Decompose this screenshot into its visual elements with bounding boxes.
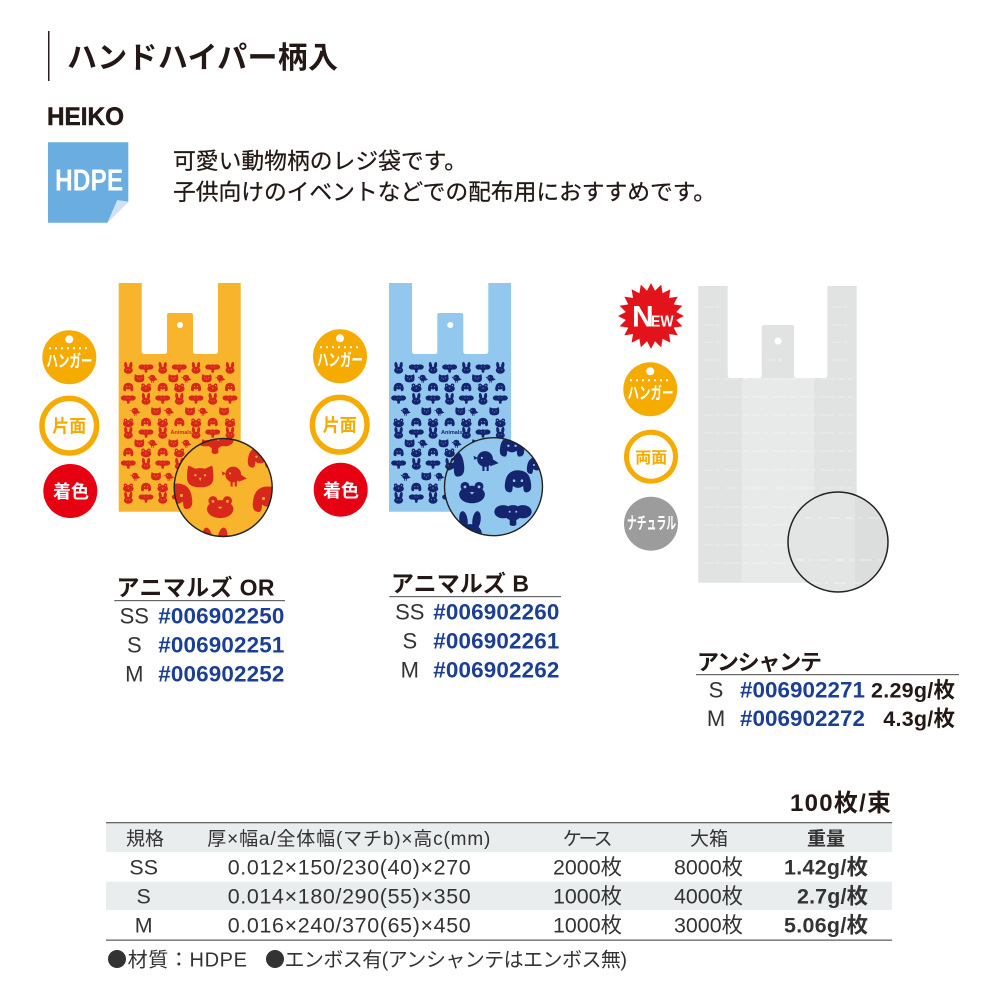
product codes and weights: enchante: 2.29g/枚 <box>871 678 955 702</box>
product codes: animals B: S <box>402 629 417 654</box>
product codes: animals B: SS <box>395 599 424 624</box>
icon: HDPE material tag <box>48 142 128 223</box>
bag: natural translucent <box>698 286 857 583</box>
product codes: animals B: M <box>401 658 419 683</box>
product codes and weights: enchante: S <box>709 677 723 702</box>
product codes: animals B: #006902262 <box>433 658 559 683</box>
table row: S: 2.7g/枚 <box>797 884 868 908</box>
table row: S: S <box>137 884 151 908</box>
magnifier: orange pattern <box>174 438 273 538</box>
product codes and weights: enchante: 4.3g/枚 <box>883 707 955 731</box>
product codes: animals OR: SS <box>120 603 149 628</box>
product codes: animals OR: S <box>127 633 142 658</box>
product codes and weights: enchante: #006902272 <box>740 706 865 731</box>
table row: SS: 0.012×150/230(40)×270 <box>228 855 471 879</box>
description text <box>173 148 716 205</box>
product codes: animals OR: #006902251 <box>158 633 284 658</box>
label: animals OR: アニマルズ OR <box>116 575 275 601</box>
footnote: ●材質：HDPE <box>107 944 247 973</box>
product codes and weights: enchante: M <box>707 706 725 731</box>
badge: hanger <box>623 362 677 416</box>
unit note: 100枚/束 <box>790 790 891 817</box>
table row: S: 4000枚 <box>674 884 743 908</box>
magnifier: blue pattern <box>444 437 544 536</box>
product codes: animals B <box>395 599 559 683</box>
product codes and weights: enchante <box>707 677 955 731</box>
badge: natural: ナチュラル <box>627 514 676 533</box>
magnifier: natural pattern <box>788 490 895 594</box>
badge: colored <box>43 464 97 518</box>
badge: one side print <box>312 397 367 452</box>
badge: new <box>618 283 684 349</box>
product codes: animals B: #006902261 <box>433 629 559 654</box>
badge: both sides print: 両面 <box>635 450 667 467</box>
label: enchante: アンシャンテ <box>697 650 822 675</box>
table header: 規格 <box>126 828 164 850</box>
badge: new: EW <box>651 314 674 331</box>
table row: SS: 2000枚 <box>553 855 622 879</box>
logo: HEIKO: HEIKO <box>47 103 124 131</box>
bag: blue <box>389 283 511 512</box>
table row: M <box>135 913 868 937</box>
badge: one side print: 片面 <box>52 417 86 437</box>
panel: animals B <box>312 283 561 683</box>
badge: colored: 着色 <box>53 481 89 502</box>
label: animals B: アニマルズ B <box>391 571 529 597</box>
product codes: animals OR: #006902250 <box>158 603 284 628</box>
product codes: animals OR: M <box>125 662 143 687</box>
table row: S <box>137 884 868 908</box>
panel: animals OR <box>42 283 285 687</box>
product codes and weights: enchante: #006902271 <box>740 677 865 702</box>
badge: one side print <box>42 398 97 453</box>
table row: S: 0.014×180/290(55)×350 <box>228 884 471 908</box>
badge: natural <box>624 497 678 551</box>
badge: colored: 着色 <box>323 480 359 501</box>
table row: M: 1000枚 <box>553 913 622 937</box>
table: specifications <box>106 822 892 941</box>
table row: M: 0.016×240/370(65)×450 <box>228 913 471 937</box>
description text: 子供向けのイベントなどでの配布用におすすめです。 <box>173 179 716 205</box>
badge: colored <box>314 463 368 517</box>
footnote <box>107 944 627 973</box>
table row: S: 1000枚 <box>553 884 622 908</box>
badge: one side print: 片面 <box>323 416 357 436</box>
product codes: animals OR <box>120 603 284 687</box>
panel: enchante <box>618 283 959 731</box>
footnote: ●エンボス有(アンシャンテはエンボス無) <box>265 944 627 973</box>
table header: 大箱 <box>690 828 728 850</box>
table row: M: 3000枚 <box>674 913 743 937</box>
table header: 重量 <box>807 828 845 850</box>
table row: M: M <box>135 913 153 937</box>
bag: orange <box>119 283 241 512</box>
badge: hanger: ハンガー <box>317 351 363 370</box>
table header: ケース <box>563 829 613 850</box>
table row: SS: 1.42g/枚 <box>784 855 868 879</box>
table row: SS: SS <box>129 855 158 879</box>
title: ハンドハイパー柄入 <box>67 42 338 75</box>
icon: HDPE material tag: HDPE <box>55 163 123 198</box>
table row: SS: 8000枚 <box>674 855 743 879</box>
badge: both sides print <box>626 432 676 481</box>
badge: hanger <box>42 330 96 384</box>
badge: hanger: ハンガー <box>46 352 92 371</box>
table row: M: 5.06g/枚 <box>784 913 868 937</box>
product codes: animals B: #006902260 <box>433 599 559 624</box>
bag: orange: Animals <box>170 430 192 436</box>
table header: 厚×幅a/全体幅(マチb)×高c(mm) <box>207 828 490 850</box>
product codes: animals OR: #006902252 <box>158 662 284 687</box>
table row: SS <box>129 855 868 879</box>
badge: hanger: ハンガー <box>628 384 674 403</box>
bag: blue: Animals <box>441 430 462 436</box>
badge: hanger <box>313 329 367 383</box>
description text: 可愛い動物柄のレジ袋です。 <box>173 148 467 174</box>
badge: new: N <box>632 301 654 334</box>
table header <box>126 828 845 850</box>
